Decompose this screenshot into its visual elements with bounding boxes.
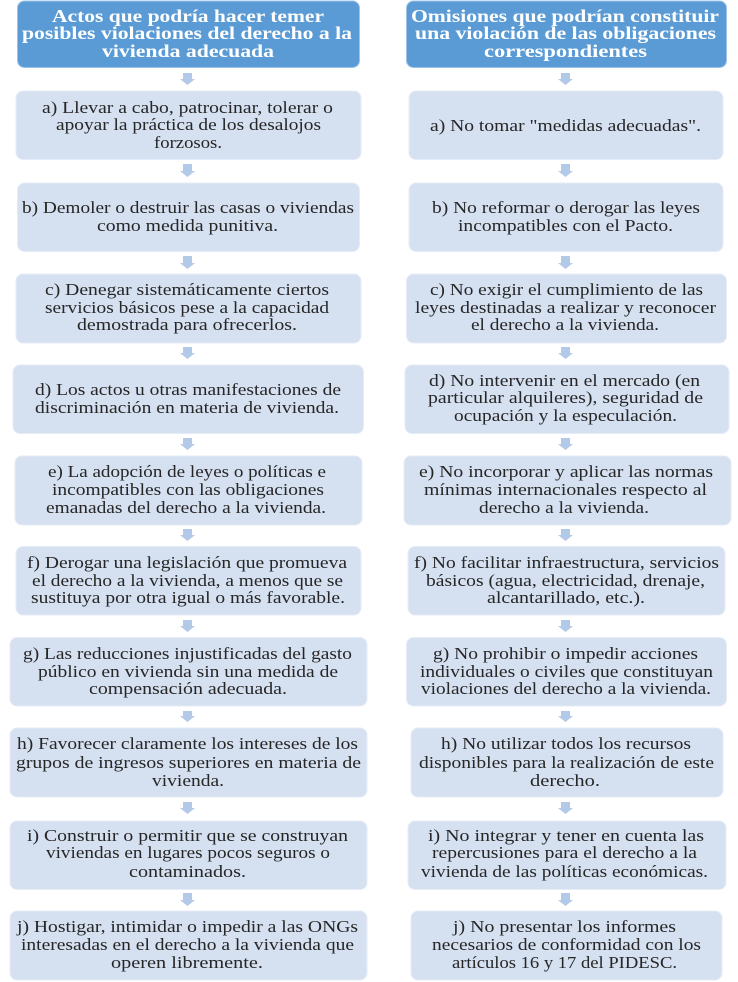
- arrow: [558, 438, 573, 450]
- box f: [16, 546, 361, 615]
- box e: [15, 456, 362, 525]
- box g: [10, 638, 367, 706]
- box j: interesadas en el derecho a la vivienda que: [21, 935, 354, 954]
- heading: omisiones: una violación de las obligaciones: [415, 23, 716, 43]
- arrow: [558, 802, 573, 814]
- box i: viviendas en lugares pocos seguros o: [46, 843, 330, 862]
- box e: e) La adopción de leyes o políticas e: [48, 462, 326, 481]
- box d: d) Los actos u otras manifestaciones de: [35, 380, 341, 399]
- box i: [10, 821, 367, 890]
- box i: vivienda de las políticas económicas.: [421, 862, 708, 881]
- arrow: [180, 347, 195, 359]
- arrow: [558, 164, 573, 177]
- box d: [405, 365, 729, 434]
- box f: f) Derogar una legislación que promueva: [27, 553, 348, 572]
- box h: h) Favorecer claramente los intereses de los: [17, 734, 358, 753]
- box d: ocupación y la especulación.: [454, 406, 677, 425]
- box j: j) Hostigar, intimidar o impedir a las ONGs: [16, 917, 358, 936]
- heading: actos: vivienda adecuada: [102, 41, 274, 61]
- box c: el derecho a la vivienda.: [471, 315, 659, 334]
- arrow: [180, 529, 195, 541]
- arrow: [558, 256, 573, 269]
- arrow: [558, 620, 573, 632]
- box d: [13, 365, 364, 434]
- box j: j) No presentar los informes: [452, 917, 676, 936]
- arrow: [180, 893, 195, 906]
- box c: demostrada para ofrecerlos.: [77, 315, 297, 334]
- box g: compensación adecuada.: [89, 679, 287, 698]
- box f: f) No facilitar infraestructura, servicios: [414, 553, 719, 572]
- box c: c) No exigir el cumplimiento de las: [430, 280, 703, 299]
- arrow: [180, 256, 195, 269]
- arrow: [180, 802, 195, 814]
- box i: contaminados.: [129, 862, 246, 881]
- box a: forzosos.: [154, 133, 222, 152]
- heading: omisiones: Omisiones que podrían constituir: [411, 6, 719, 26]
- box b: b) No reformar o derogar las leyes: [432, 198, 700, 217]
- box b: [409, 183, 723, 252]
- box h: [411, 728, 723, 797]
- box h: h) No utilizar todos los recursos: [441, 734, 691, 753]
- heading: omisiones: [406, 1, 726, 68]
- box f: [408, 546, 725, 615]
- heading: actos: [18, 1, 360, 68]
- box j: necesarios de conformidad con los: [432, 935, 701, 954]
- box c: servicios básicos pese a la capacidad: [45, 298, 330, 317]
- box c: [406, 274, 726, 343]
- box e: incompatibles con las obligaciones: [52, 480, 324, 499]
- box g: público en vivienda sin una medida de: [38, 662, 338, 681]
- heading: actos: posibles violaciones del derecho a la: [22, 23, 352, 43]
- box h: disponibles para la realización de este: [419, 753, 714, 772]
- box i: repercusiones para el derecho a la: [432, 843, 698, 862]
- box f: sustituya por otra igual o más favorable.: [31, 588, 345, 607]
- heading: omisiones: correspondientes: [484, 41, 647, 61]
- box f: el derecho a la vivienda, a menos que se: [32, 571, 343, 590]
- heading: actos: Actos que podría hacer temer: [52, 6, 324, 26]
- box h: vivienda.: [152, 771, 224, 790]
- box j: operen libremente.: [111, 953, 263, 972]
- box a: a) No tomar "medidas adecuadas".: [430, 116, 701, 135]
- box e: derecho a la vivienda.: [479, 498, 649, 517]
- box a: apoyar la práctica de los desalojos: [56, 115, 321, 134]
- box g: [406, 638, 726, 706]
- box j: [411, 911, 722, 980]
- box e: emanadas del derecho a la vivienda.: [46, 498, 326, 517]
- box f: alcantarillado, etc.).: [487, 588, 645, 607]
- box a: [16, 91, 361, 160]
- box f: básicos (agua, electricidad, drenaje,: [426, 571, 705, 590]
- box d: discriminación en materia de vivienda.: [35, 398, 339, 417]
- box c: c) Denegar sistemáticamente ciertos: [45, 280, 329, 299]
- box g: individuales o civiles que constituyan: [420, 662, 714, 681]
- box b: b) Demoler o destruir las casas o viviendas: [22, 198, 354, 217]
- box j: [10, 911, 367, 980]
- column: actos: [10, 1, 367, 980]
- box a: [409, 91, 723, 160]
- box h: [10, 728, 367, 797]
- box g: g) No prohibir o impedir acciones: [433, 644, 698, 663]
- box d: particular alquileres), seguridad de: [428, 388, 703, 407]
- box b: incompatibles con el Pacto.: [458, 216, 673, 235]
- arrow: [180, 73, 195, 85]
- box c: [16, 274, 361, 343]
- arrow: [180, 438, 195, 450]
- box j: artículos 16 y 17 del PIDESC.: [452, 953, 677, 972]
- box b: como medida punitiva.: [97, 216, 278, 235]
- arrow: [180, 711, 195, 722]
- box e: e) No incorporar y aplicar las normas: [419, 462, 713, 481]
- box h: grupos de ingresos superiores en materia de: [16, 753, 361, 772]
- arrow: [558, 73, 573, 85]
- box g: violaciones del derecho a la vivienda.: [421, 679, 711, 698]
- box i: i) Construir o permitir que se construyan: [27, 826, 349, 845]
- column: omisiones: [404, 1, 731, 980]
- arrow: [558, 347, 573, 359]
- box e: mínimas internacionales respecto al: [424, 480, 707, 499]
- arrow: [180, 620, 195, 632]
- box d: d) No intervenir en el mercado (en: [429, 371, 701, 390]
- arrow: [558, 711, 573, 722]
- box e: [404, 456, 731, 525]
- box c: leyes destinadas a realizar y reconocer: [415, 298, 716, 317]
- arrow: [558, 893, 573, 906]
- box i: [408, 821, 726, 890]
- arrow: [558, 529, 573, 541]
- box i: i) No integrar y tener en cuenta las: [428, 826, 704, 845]
- box g: g) Las reducciones injustificadas del gasto: [23, 644, 352, 663]
- box h: derecho.: [530, 771, 600, 790]
- box a: a) Llevar a cabo, patrocinar, tolerar o: [42, 98, 333, 117]
- arrow: [180, 164, 195, 177]
- box b: [18, 183, 360, 252]
